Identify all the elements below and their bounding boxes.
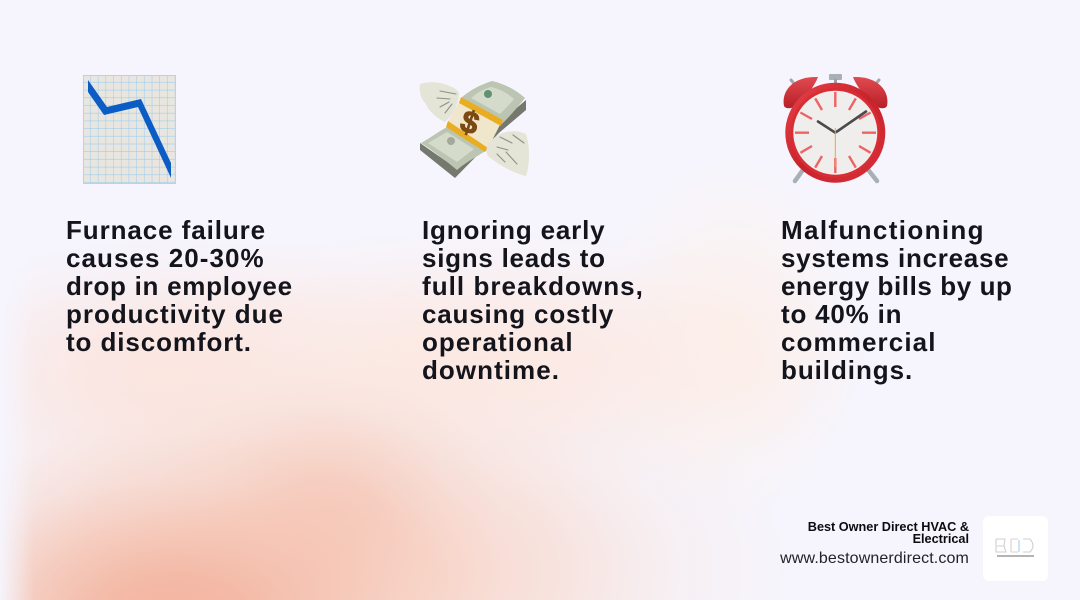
footer: website: www.bestownerdirect.com — [780, 550, 969, 567]
text: productivity: causes 20-30% — [66, 243, 265, 273]
bell rods — [791, 80, 879, 101]
ticks — [795, 92, 876, 173]
footer: logo — [983, 516, 1048, 581]
text: productivity: to discomfort. — [66, 327, 252, 357]
left wing — [420, 82, 459, 122]
text: productivity: Furnace failure — [66, 215, 266, 245]
hands — [818, 122, 835, 133]
dollar sign: $ — [456, 103, 483, 142]
footer: company name: Best Owner Direct HVAC & — [808, 520, 969, 534]
text: productivity — [66, 215, 293, 357]
lower bill — [421, 127, 487, 170]
footer: company name — [808, 520, 969, 546]
text: energy bills: to 40% in — [781, 299, 902, 329]
stack side — [420, 100, 526, 178]
text: downtime: causing costly — [422, 299, 614, 329]
footer: company name: Electrical — [913, 532, 969, 546]
text: productivity: productivity due — [66, 299, 284, 329]
text: energy bills: buildings. — [781, 355, 913, 385]
top knob — [829, 74, 842, 80]
text: downtime — [422, 215, 644, 385]
upper bill — [461, 81, 525, 124]
icon: money with wings — [420, 81, 529, 178]
text: energy bills: Malfunctioning — [781, 215, 985, 245]
text: energy bills: energy bills by up — [781, 271, 1012, 301]
bells — [784, 77, 818, 108]
paper band — [447, 98, 502, 150]
text: energy bills: commercial — [781, 327, 937, 357]
text: energy bills: systems increase — [781, 243, 1009, 273]
text: productivity: drop in employee — [66, 271, 293, 301]
right wing — [486, 131, 529, 176]
legs — [795, 167, 877, 181]
icon: falling chart — [83, 75, 176, 184]
text: downtime: Ignoring early — [422, 215, 605, 245]
text: downtime: operational — [422, 327, 574, 357]
text: downtime: full breakdowns, — [422, 271, 644, 301]
text: downtime: downtime. — [422, 355, 560, 385]
text: energy bills — [781, 215, 1012, 385]
icon: alarm clock — [784, 74, 888, 184]
text: downtime: signs leads to — [422, 243, 606, 273]
body — [785, 83, 885, 183]
